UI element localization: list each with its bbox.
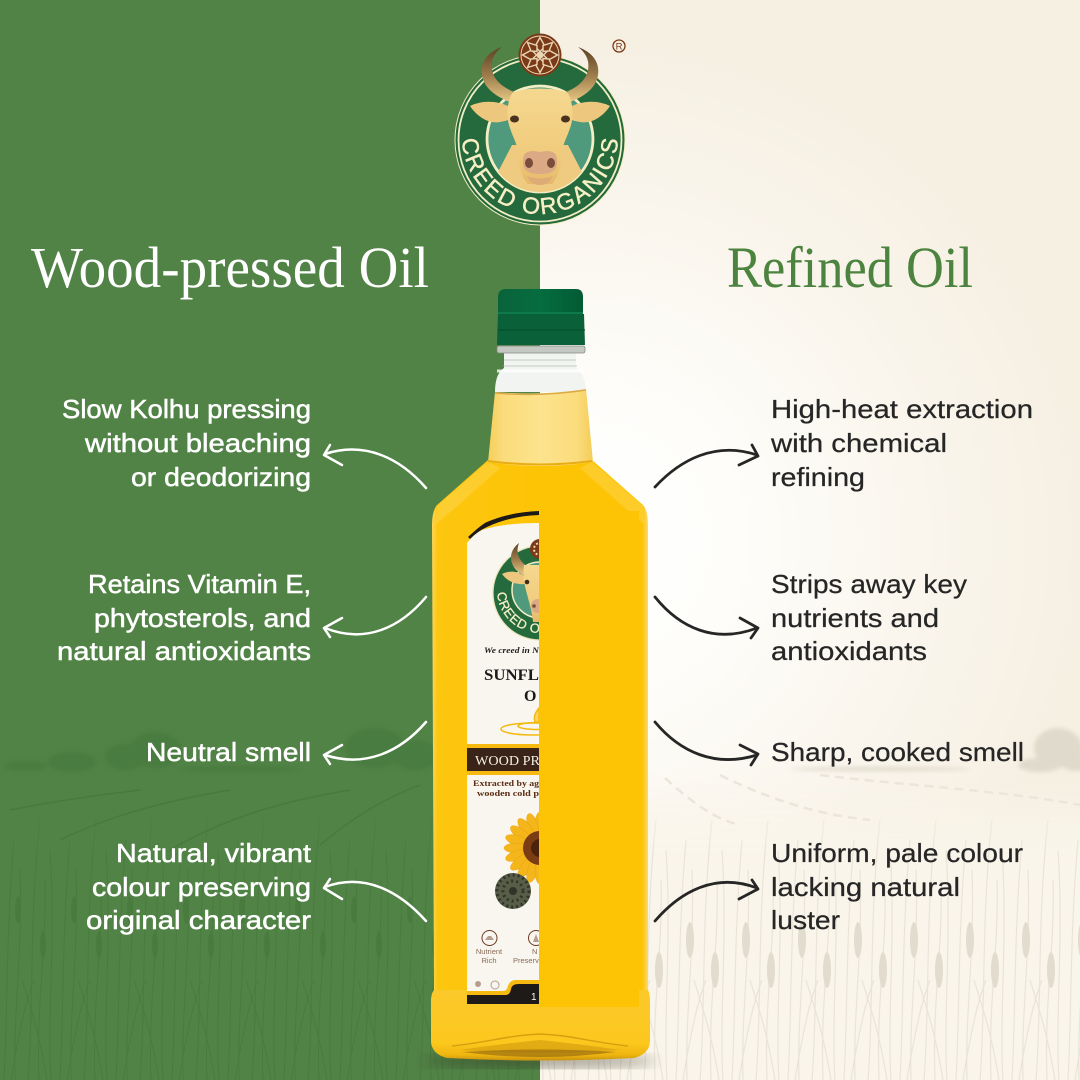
point 4: wood-pressed: Natural, vibrant <box>116 838 312 868</box>
label tagline: We creed in N <box>484 645 540 655</box>
label mini logo: CREED O <box>497 592 539 633</box>
point 1: refined: refining <box>771 462 865 492</box>
label description <box>473 780 539 798</box>
label feature icons: N <box>532 947 537 956</box>
label oil ripple <box>500 706 539 736</box>
point 4: refined: Uniform, pale colour <box>771 838 1023 868</box>
point 2: refined <box>771 569 967 666</box>
arrow: left 4 <box>324 879 426 921</box>
point 1: refined: High-heat extraction <box>771 394 1033 424</box>
point 1: wood-pressed: without bleaching <box>84 428 311 458</box>
label top arc <box>468 511 540 539</box>
label description: Extracted by ag <box>473 778 540 788</box>
point 2: wood-pressed: Retains Vitamin E, <box>88 569 311 599</box>
point 1: wood-pressed: or deodorizing <box>131 462 311 492</box>
label product name: SUNFL <box>484 667 539 684</box>
label feature icons: Rich <box>481 956 497 965</box>
point 3: refined: Sharp, cooked smell <box>771 737 1024 767</box>
point 4: wood-pressed: original character <box>86 905 311 935</box>
label feature icons <box>475 930 544 989</box>
arrow: right 3 <box>655 722 758 765</box>
label band: wood pressed: WOOD PR <box>475 753 540 768</box>
point 1: wood-pressed <box>62 394 311 492</box>
point 2: wood-pressed: phytosterols, and <box>94 603 311 633</box>
point 3: wood-pressed: Neutral smell <box>146 737 311 767</box>
label bottom band: 1 <box>531 992 537 1003</box>
pale oil in shoulder <box>488 389 593 466</box>
point 4: wood-pressed <box>86 838 312 935</box>
point 4: wood-pressed: colour preserving <box>92 872 311 902</box>
point 2: wood-pressed: natural antioxidants <box>57 636 311 666</box>
arrow: right 1 <box>655 445 758 487</box>
label description: wooden cold p <box>477 788 539 798</box>
point 1: refined <box>770 394 1033 492</box>
logo emblem <box>518 34 562 76</box>
background: right cream panel <box>540 0 1080 1080</box>
bottle neck glass <box>495 352 586 392</box>
label sunflower seeds <box>495 873 531 909</box>
label mini logo <box>492 539 539 641</box>
point 2: refined: Strips away key <box>771 569 967 599</box>
logo cow <box>470 47 610 200</box>
background: left green panel <box>0 0 540 1080</box>
brand logo: Creed Organics <box>454 34 626 226</box>
bottle: half wood-pressed label, half refined oil <box>384 289 696 1070</box>
heading: Refined Oil: Refined Oil <box>727 235 973 300</box>
point 4: refined: luster <box>771 905 840 935</box>
label: left half <box>467 511 539 1004</box>
heading: Wood-pressed Oil: Wood-pressed Oil <box>31 235 429 300</box>
label product name <box>484 670 538 701</box>
shoulder highlights <box>436 462 500 524</box>
registered mark: R <box>616 42 623 52</box>
refined half oil overlay <box>539 511 639 1007</box>
arrow: left 1 <box>324 445 426 488</box>
point 4: refined: lacking natural <box>771 872 960 902</box>
point 2: refined: antioxidants <box>771 636 927 666</box>
label feature icons: Preserv <box>513 956 539 965</box>
label bottom band <box>467 980 540 1004</box>
point 1: wood-pressed: Slow Kolhu pressing <box>62 394 311 424</box>
bottle cap <box>497 289 585 353</box>
point 2: refined: nutrients and <box>771 603 939 633</box>
arrow: left 3 <box>324 722 426 764</box>
bottle base <box>431 990 650 1060</box>
label band: wood pressed <box>467 744 540 775</box>
point 2: wood-pressed <box>57 569 311 666</box>
logo wordmark: CREED ORGANICS <box>462 138 618 214</box>
label feature icons: Nutrient <box>476 947 503 956</box>
point 4: refined <box>771 838 1023 935</box>
oil body <box>431 460 650 1060</box>
arrow: right 4 <box>655 880 758 921</box>
bottle shadow <box>424 1054 656 1068</box>
label sunflower <box>504 812 539 884</box>
arrow: left 2 <box>324 597 426 637</box>
label product name: O <box>524 688 536 705</box>
arrow: right 2 <box>655 597 758 638</box>
registered mark <box>613 40 625 52</box>
point 1: refined: with chemical <box>770 428 947 458</box>
